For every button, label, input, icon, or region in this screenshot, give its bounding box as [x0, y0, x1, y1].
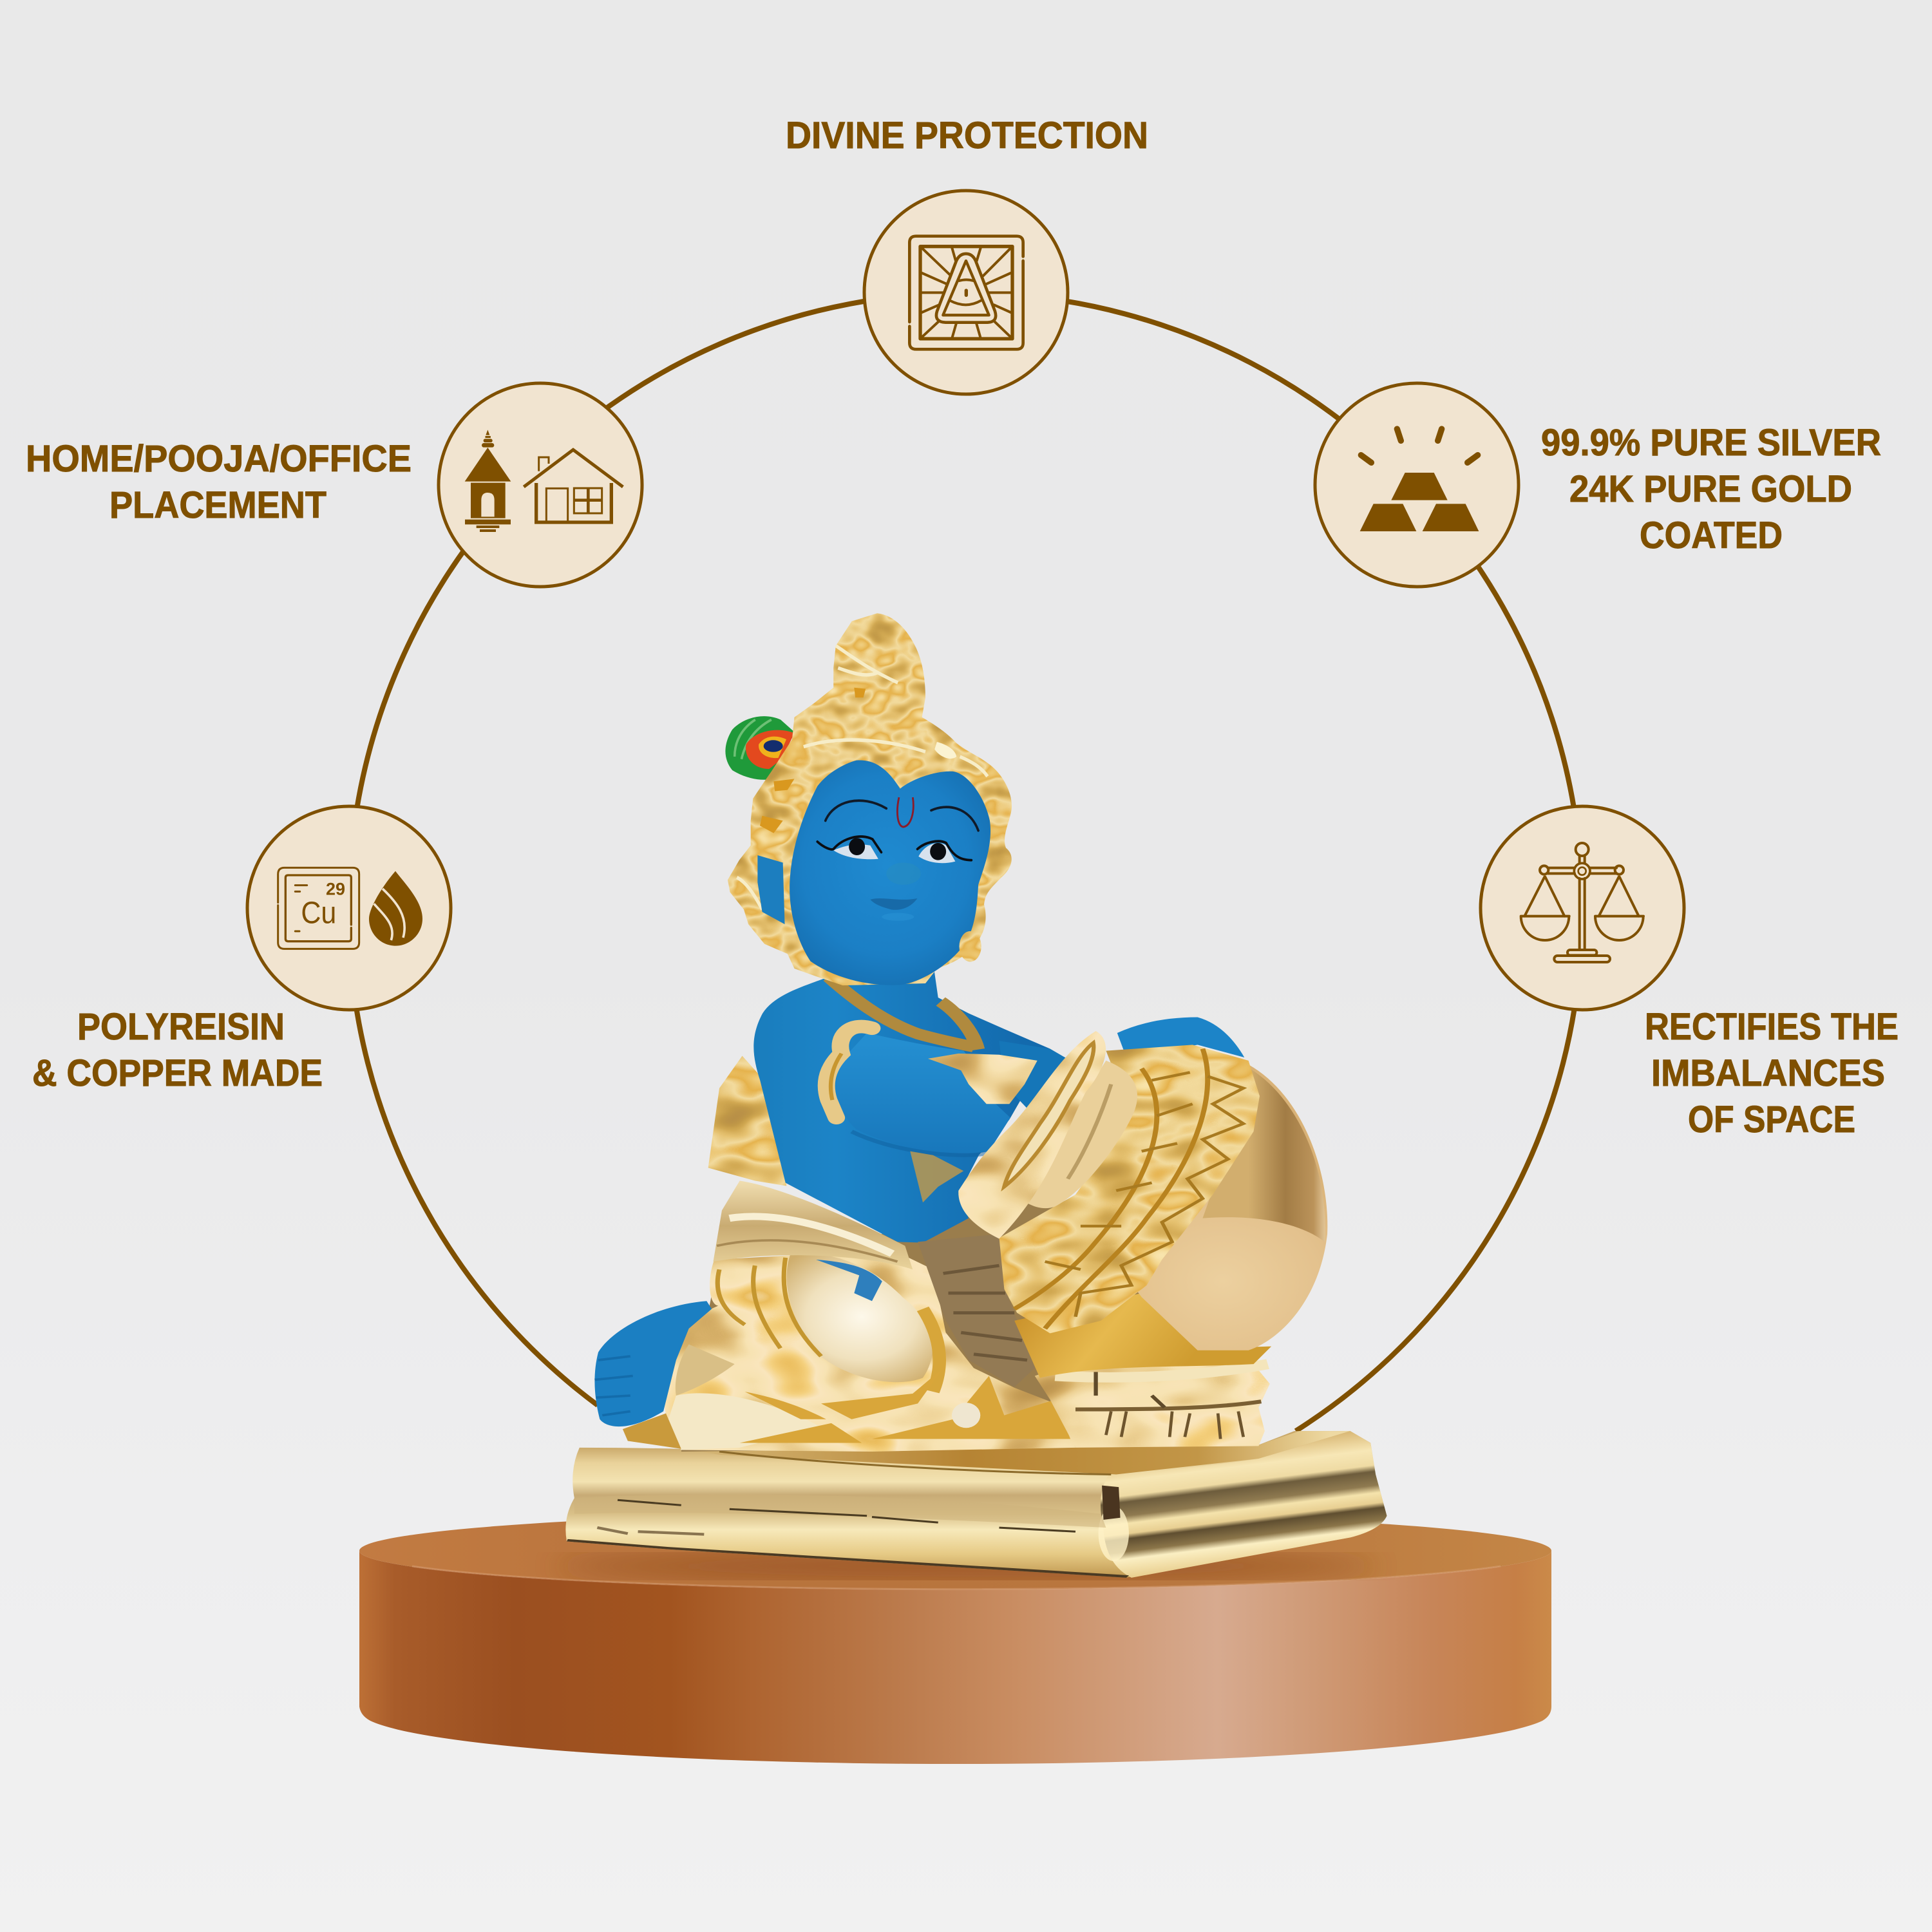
near arm [837, 1033, 1010, 1154]
body underlayer [681, 1187, 1258, 1452]
pot neck [1014, 1061, 1137, 1208]
fingers [928, 1054, 1037, 1104]
pedestal [359, 1512, 1551, 1764]
nose and mouth [870, 862, 921, 921]
heading: polyresin and copper [32, 1006, 323, 1094]
crown and hair [728, 613, 1012, 985]
heading: placement [26, 438, 412, 526]
brown pleats [918, 1234, 1035, 1387]
icon circle: copper element and drop: 29 [326, 879, 345, 898]
heading: divine protection: DIVINE PROTECTION [786, 115, 1148, 156]
pot sphere [1075, 1065, 1327, 1350]
right eye [918, 841, 971, 863]
leg drape [666, 1393, 821, 1450]
heading: polyresin and copper: & COPPER MADE [32, 1052, 323, 1094]
eyebrows [826, 800, 978, 831]
armband [826, 1027, 872, 1118]
heading: placement: HOME/POOJA/OFFICE [26, 438, 412, 480]
icon circle: balance scales [1481, 806, 1684, 1010]
icon circle: pyramid eye [864, 191, 1068, 394]
feature: divine protection [786, 115, 1148, 394]
pot stand [1035, 1347, 1270, 1448]
heading: silver and gold: COATED [1640, 515, 1783, 556]
heading: rectifies space [1645, 1006, 1899, 1141]
statue head [725, 613, 1012, 985]
statue base [565, 1431, 1387, 1578]
pot rim [958, 1031, 1106, 1239]
left eye [817, 837, 881, 859]
gold wing behind back [708, 1056, 786, 1186]
leg gold streaks [740, 1368, 1070, 1443]
feature: rectifies space [1481, 806, 1899, 1141]
heading: placement: PLACEMENT [109, 484, 327, 526]
heading: rectifies space: OF SPACE [1688, 1099, 1855, 1141]
necklace [829, 977, 978, 1050]
icon circle: gold bars [1315, 383, 1519, 587]
heading: rectifies space: RECTIFIES THE [1645, 1006, 1899, 1048]
feature: polyresin and copper [32, 806, 451, 1094]
peacock feather [725, 716, 795, 780]
pot decorated band [999, 1045, 1260, 1333]
torso [753, 962, 1050, 1243]
shiny knee [787, 1253, 933, 1382]
statue body [594, 962, 1327, 1452]
face [790, 760, 990, 985]
tilak [897, 797, 913, 827]
chest trim [910, 1151, 963, 1202]
feature: placement [26, 383, 642, 587]
sash [714, 1181, 913, 1269]
heading: silver and gold [1541, 422, 1881, 556]
heading: silver and gold: 99.9% PURE SILVER [1541, 422, 1881, 464]
icon circle: copper element and drop: Cu [301, 895, 336, 930]
icon circle: temple and house [439, 383, 642, 587]
heading: polyresin and copper: POLYREISIN [77, 1006, 285, 1048]
dhoti lower [663, 1250, 1075, 1452]
yellow gold under pot [1014, 1293, 1271, 1378]
statue: Krishna with butter pot [565, 613, 1387, 1578]
feature: silver and gold [1315, 383, 1881, 587]
crown highlights [737, 646, 987, 909]
blue foot [594, 1301, 712, 1426]
far arm [1117, 1018, 1244, 1057]
ear [757, 855, 785, 924]
gold under foot [623, 1414, 681, 1449]
icon circle: copper element and drop [247, 806, 451, 1010]
heading: silver and gold: 24K PURE GOLD [1569, 468, 1852, 510]
earring [959, 931, 981, 961]
heading: rectifies space: IMBALANCES [1651, 1052, 1885, 1094]
connecting ring [348, 293, 1582, 1431]
